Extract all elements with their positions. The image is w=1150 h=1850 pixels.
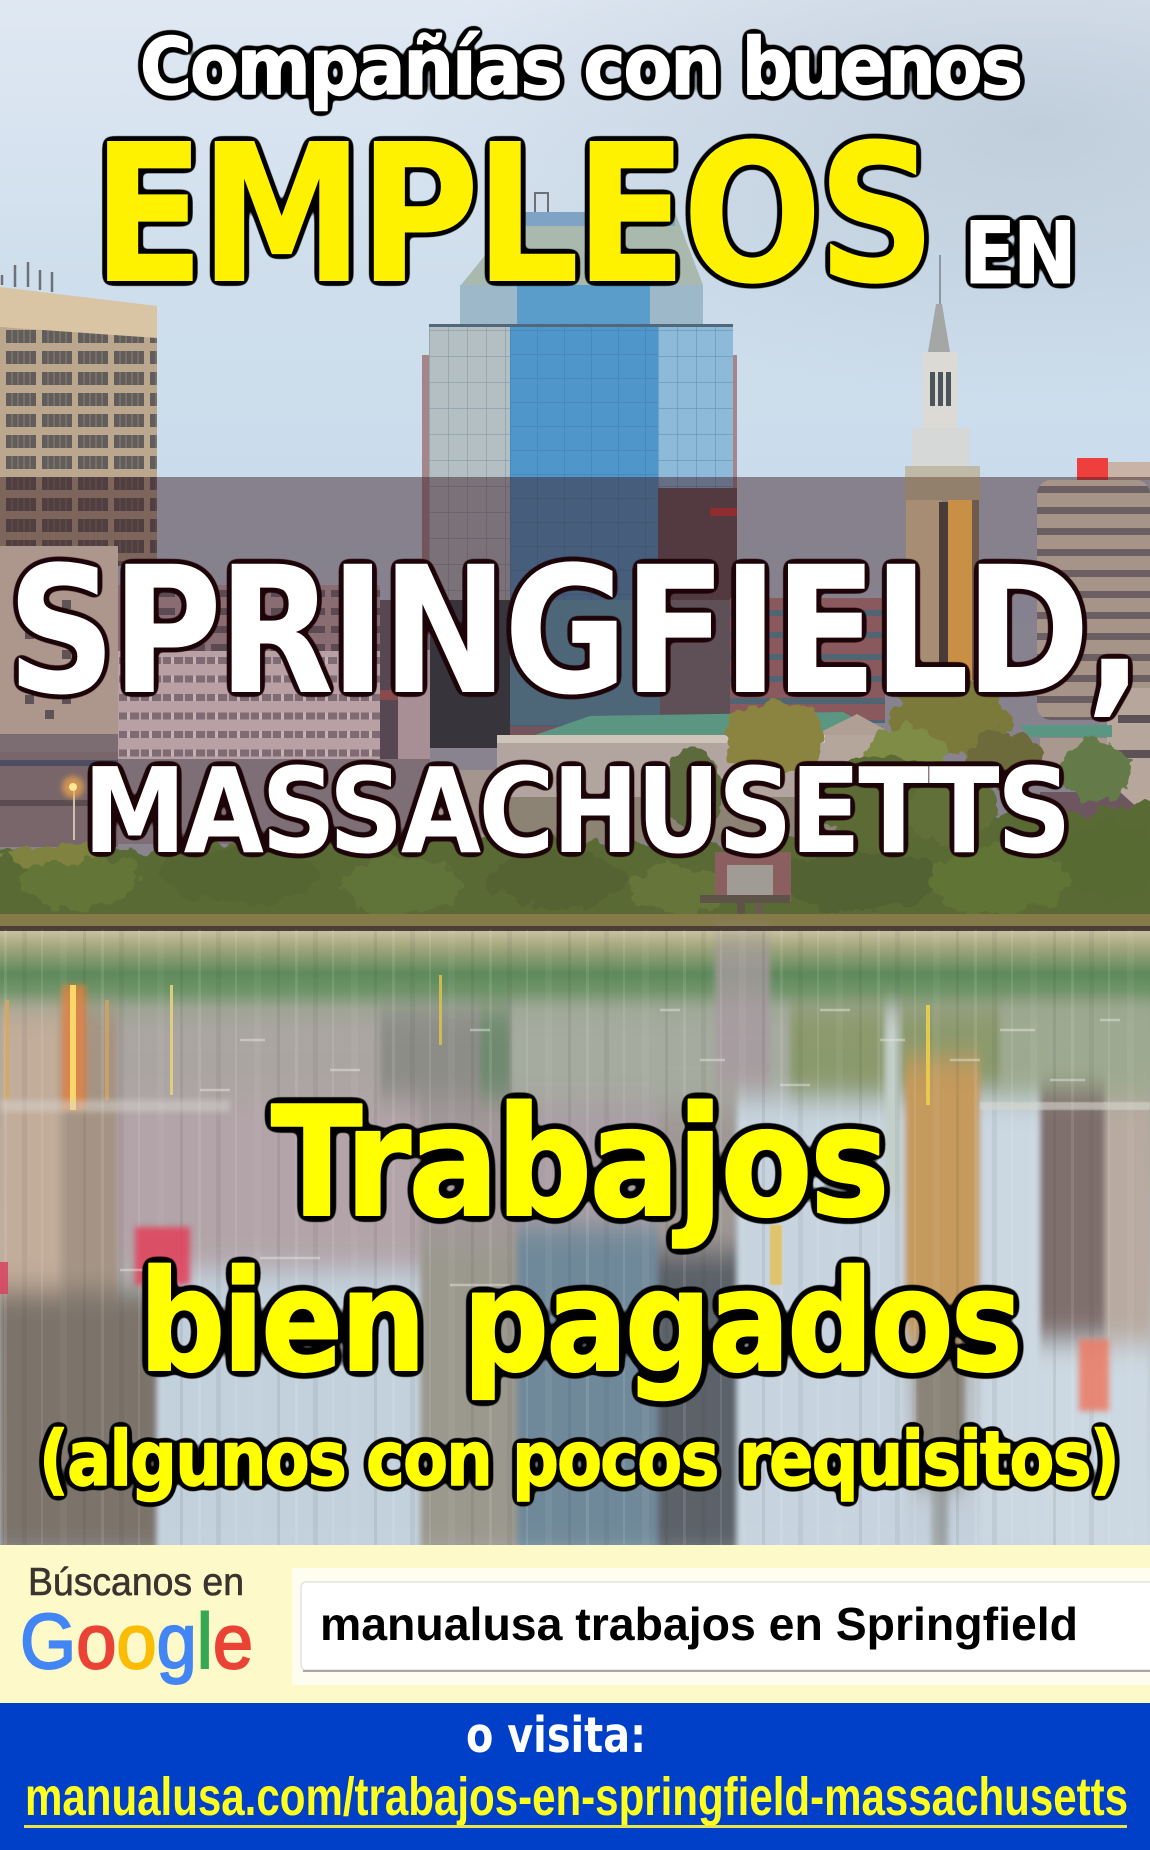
- search box shadow: [303, 1670, 1150, 1672]
- title word: EMPLEOS: EMPLEOS: [92, 104, 931, 327]
- large banded hotel building: [118, 585, 430, 844]
- river water: [0, 930, 1150, 1545]
- title word: EN: EN: [964, 204, 1074, 304]
- sky: [0, 0, 1150, 930]
- street lamp glow: [62, 776, 84, 840]
- right building roof with red sign: [1077, 458, 1150, 480]
- lower left tan building: [0, 546, 118, 847]
- url underline: [24, 1825, 1127, 1828]
- clouds: [0, 0, 1150, 500]
- panel: google search strip: [0, 1545, 1150, 1703]
- small house with purple roof: [1040, 792, 1140, 830]
- footer background: [0, 1703, 1150, 1850]
- maroon mid-rise building: [730, 598, 885, 723]
- water light reflections: [0, 975, 1150, 1411]
- title line: Compañías con buenos: Compañías con buenos: [140, 23, 1021, 113]
- red river structure: [700, 852, 791, 927]
- trees and river bank: [0, 682, 1150, 928]
- reflected buildings in the water: [0, 940, 1150, 1562]
- search area backdrop: [292, 1568, 1150, 1685]
- panel: website footer: [0, 1703, 1150, 1850]
- dark and glass mid-rise blocks: [430, 600, 730, 748]
- dark translucent band: [0, 477, 1150, 925]
- strip background: [0, 1545, 1150, 1703]
- search box: [301, 1582, 1150, 1670]
- central glass tower: [422, 193, 737, 735]
- shoreline: [0, 914, 1150, 931]
- search query text: manualusa trabajos en Springfield: [320, 1598, 1078, 1650]
- logo: Google: Google: [20, 1597, 253, 1685]
- clock tower shaft: [905, 477, 980, 682]
- left office building: [0, 262, 157, 566]
- headline: bien pagados: bien pagados: [139, 1241, 1020, 1404]
- water streak texture: [0, 930, 1150, 1545]
- label: Búscanos en: Búscanos en: [28, 1561, 244, 1604]
- footer-side clip of water blur: [0, 926, 1150, 931]
- classical building with green roof: [430, 712, 1112, 842]
- clock tower upper part: [905, 255, 980, 478]
- right curved building: [1037, 480, 1150, 813]
- label: o visita: o visita:: [466, 1707, 646, 1764]
- headline: Trabajos: Trabajos: [271, 1074, 887, 1251]
